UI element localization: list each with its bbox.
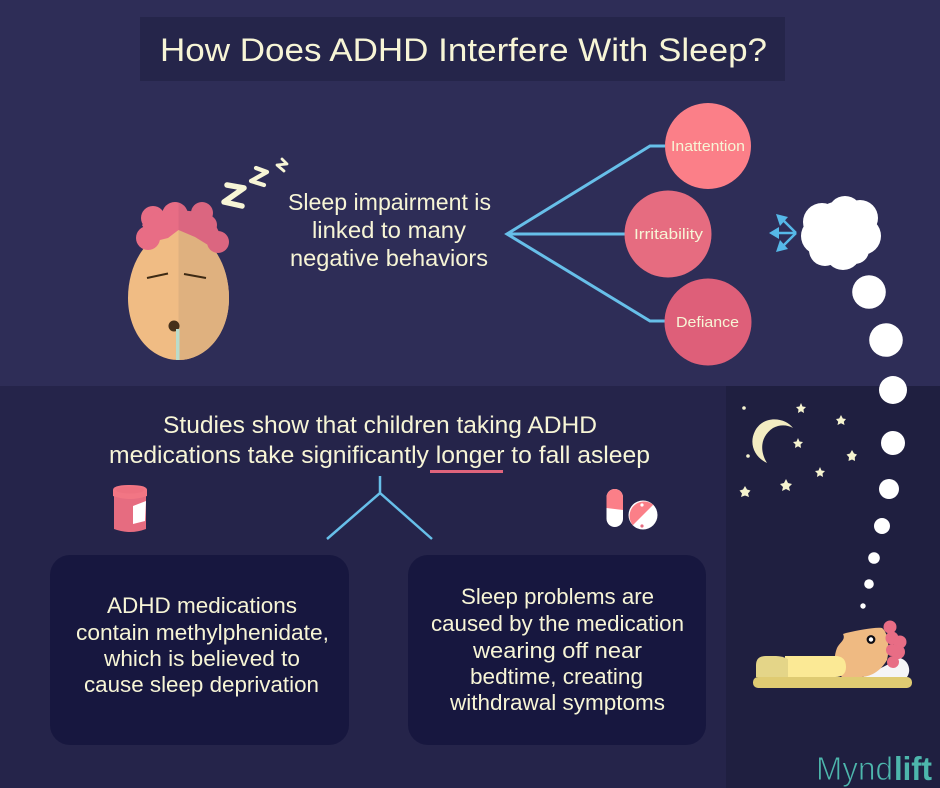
panel: lower right night sky	[726, 386, 940, 788]
stars	[740, 403, 857, 497]
connector lines to behaviors	[507, 146, 665, 321]
blanket	[785, 656, 846, 677]
panel: methylphenidate callout: which is believed to	[103, 646, 300, 671]
drool	[176, 329, 180, 360]
text: studies statement	[109, 412, 650, 469]
panel: withdrawal callout: Sleep problems are	[461, 584, 654, 609]
pillow	[863, 658, 909, 677]
panel: top background	[0, 0, 940, 386]
text: studies statement: Studies show that children taking ADHD	[163, 412, 597, 439]
circle: Defiance: Defiance	[676, 314, 739, 331]
head	[835, 628, 888, 677]
text: sleep impairment statement: linked to many	[312, 217, 467, 243]
icon: snoring Z letters	[224, 159, 287, 206]
text: sleep impairment statement	[288, 189, 491, 271]
circle: Inattention	[665, 103, 751, 189]
text: sleep impairment statement: negative behaviors	[290, 245, 488, 271]
title	[140, 17, 785, 81]
thought bubbles trail	[852, 275, 907, 609]
underline: longer	[430, 470, 503, 473]
circle: Irritability: Irritability	[634, 226, 704, 243]
mouth	[168, 320, 180, 332]
eye	[868, 636, 874, 643]
text: sleep impairment statement: Sleep impairment is	[288, 189, 491, 215]
logo: Myndlift: Mynd	[816, 750, 893, 787]
panel: withdrawal callout	[408, 555, 706, 745]
logo: Myndlift: lift	[894, 750, 932, 787]
eyes	[147, 274, 206, 278]
panel: withdrawal callout: withdrawal symptoms	[449, 690, 665, 715]
text: studies statement: medications take significantly longer to fall asleep	[109, 442, 650, 469]
panel: withdrawal callout: bedtime, creating	[470, 664, 643, 689]
panel: methylphenidate callout: contain methylphenidate,	[76, 620, 329, 645]
panel: methylphenidate callout: cause sleep deprivation	[84, 672, 319, 697]
hair	[884, 620, 906, 668]
panel: lower left background	[0, 386, 726, 788]
circle: Defiance	[664, 278, 752, 366]
panel: withdrawal callout: wearing off near	[472, 638, 642, 663]
feet	[756, 656, 788, 677]
icon: pills	[606, 489, 658, 530]
circle: Irritability	[624, 190, 712, 278]
panel: methylphenidate callout	[50, 555, 349, 745]
title: How Does ADHD Interfere With Sleep?	[160, 32, 767, 68]
circle: Inattention: Inattention	[671, 138, 745, 155]
icon: scattering arrows	[769, 214, 796, 252]
icon: sleeping head	[128, 202, 229, 360]
icon: thought cloud	[801, 196, 881, 270]
branching connector	[327, 476, 432, 539]
mattress	[753, 677, 912, 688]
panel: methylphenidate callout: ADHD medications	[107, 593, 297, 618]
icon: medicine bottle	[113, 485, 147, 532]
logo: Myndlift	[816, 750, 932, 787]
icon: sleeping child in bed	[753, 620, 912, 688]
panel: withdrawal callout: caused by the medication	[431, 611, 684, 636]
icon: crescent moon	[752, 419, 793, 463]
